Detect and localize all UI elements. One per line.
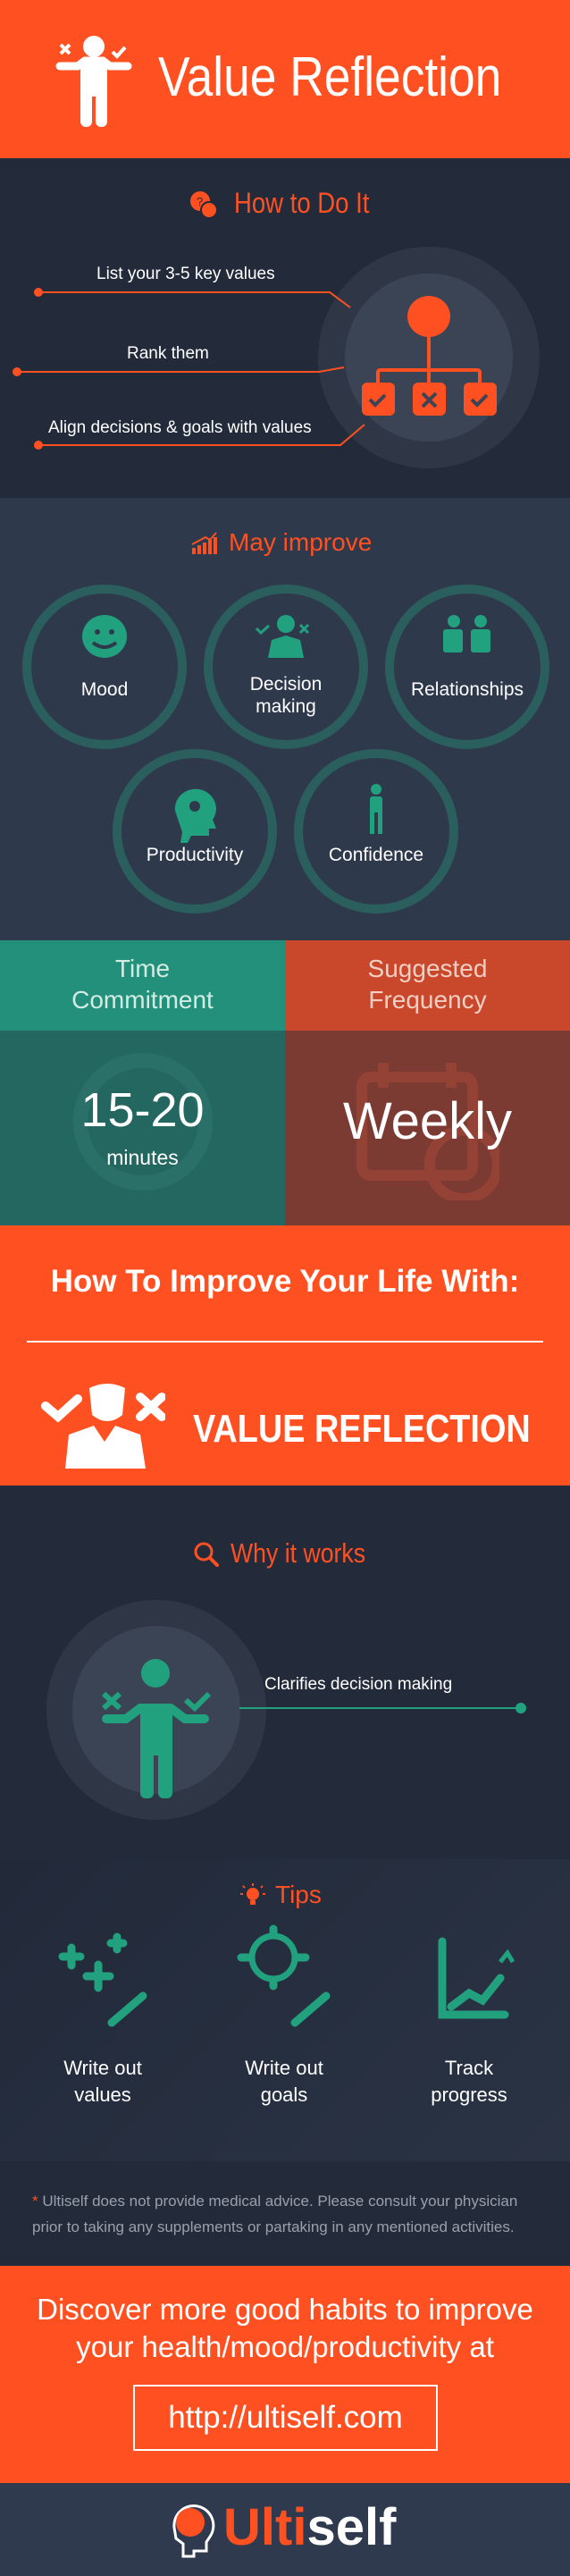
tip: track progress: Track [445,2057,493,2079]
header: time commitment: Commitment [71,986,214,1014]
icon: rising chart [191,532,217,554]
heading: may improve: May improve [229,528,372,556]
label: relationships: Relationships [411,679,524,700]
tip: write out values: values [74,2084,131,2106]
step 2: Rank them [127,344,209,363]
banner heading: How To Improve Your Life With: [51,1264,519,1299]
label: decision making [250,674,322,717]
tip: write out goals: goals [261,2084,307,2106]
banner title: VALUE REFLECTION [193,1407,531,1451]
tip: write out goals: Write out [245,2057,323,2079]
title: Value Reflection [158,46,501,108]
label: decision making: making [256,696,316,717]
icon: lightbulb [240,1883,265,1905]
panel: how to do it [0,158,570,498]
unit: minutes [106,1146,179,1169]
diagram: org chart circle [13,247,540,468]
call to action [0,2266,570,2483]
tip: write out goals [245,2057,323,2106]
header: suggested frequency: Frequency [368,986,487,1014]
tip: track progress [431,2057,507,2106]
disclaimer: * Ultiself does not provide medical advice. Please consult your physician [32,2193,517,2210]
header: time commitment: Time [115,955,170,982]
benefit circles [22,585,549,913]
url button: http://ultiself.com [168,2400,403,2435]
tip: write out values: Write out [63,2057,142,2079]
icon: magnifier [195,1543,220,1568]
panel: time commitment [0,940,285,1225]
heading: tips: Tips [275,1881,322,1908]
logo text: Ultiself [223,2498,396,2556]
icon: clock [73,1053,213,1191]
tip: track progress: progress [431,2084,507,2106]
heading: tips [240,1881,322,1908]
number: 15-20 [80,1083,205,1137]
step 3: Align decisions & goals with values [48,418,312,437]
icon: brain head [172,2504,214,2558]
icon: calendar [356,1063,499,1200]
footer logo [0,2483,570,2576]
label: confidence: Confidence [329,845,423,865]
step 1: List your 3-5 key values [96,265,275,283]
value: Weekly [343,1092,512,1150]
reason text: Clarifies decision making [264,1675,452,1694]
heading: how to do it: How to Do It [234,187,369,219]
diagram: person circle [46,1600,526,1820]
label: mood: Mood [81,679,128,700]
tip: write out values [63,2057,142,2106]
label: decision making: Decision [250,674,322,695]
icon: speech bubbles: ? [197,195,203,208]
icon: businessman check/x [41,1384,165,1469]
cta text: Discover more good habits to improve [37,2293,533,2326]
disclaimer [0,2161,570,2266]
cta text [37,2293,533,2363]
header banner [0,0,570,158]
panel: tips [0,1859,570,2161]
header: suggested frequency: Suggested [368,955,487,982]
body: 15-20 minutes [0,1031,285,1225]
panel: suggested frequency [285,940,570,1225]
label: productivity: Productivity [147,845,243,865]
url button [133,2385,438,2451]
header: time commitment [0,940,285,1031]
icon: speech bubbles [190,191,216,217]
panel: may improve [0,498,570,940]
disclaimer: prior to taking any supplements or partaking in any mentioned activities. [32,2218,515,2235]
heading: why it works: Why it works [231,1537,365,1569]
body: weekly [285,1031,570,1225]
cta text: your health/mood/productivity at [76,2330,494,2363]
header: suggested frequency [285,940,570,1031]
panel: why it works [0,1486,570,1859]
tip icons [59,1925,515,2027]
icon: person deciding [55,36,132,127]
banner: how to improve [0,1225,570,1486]
